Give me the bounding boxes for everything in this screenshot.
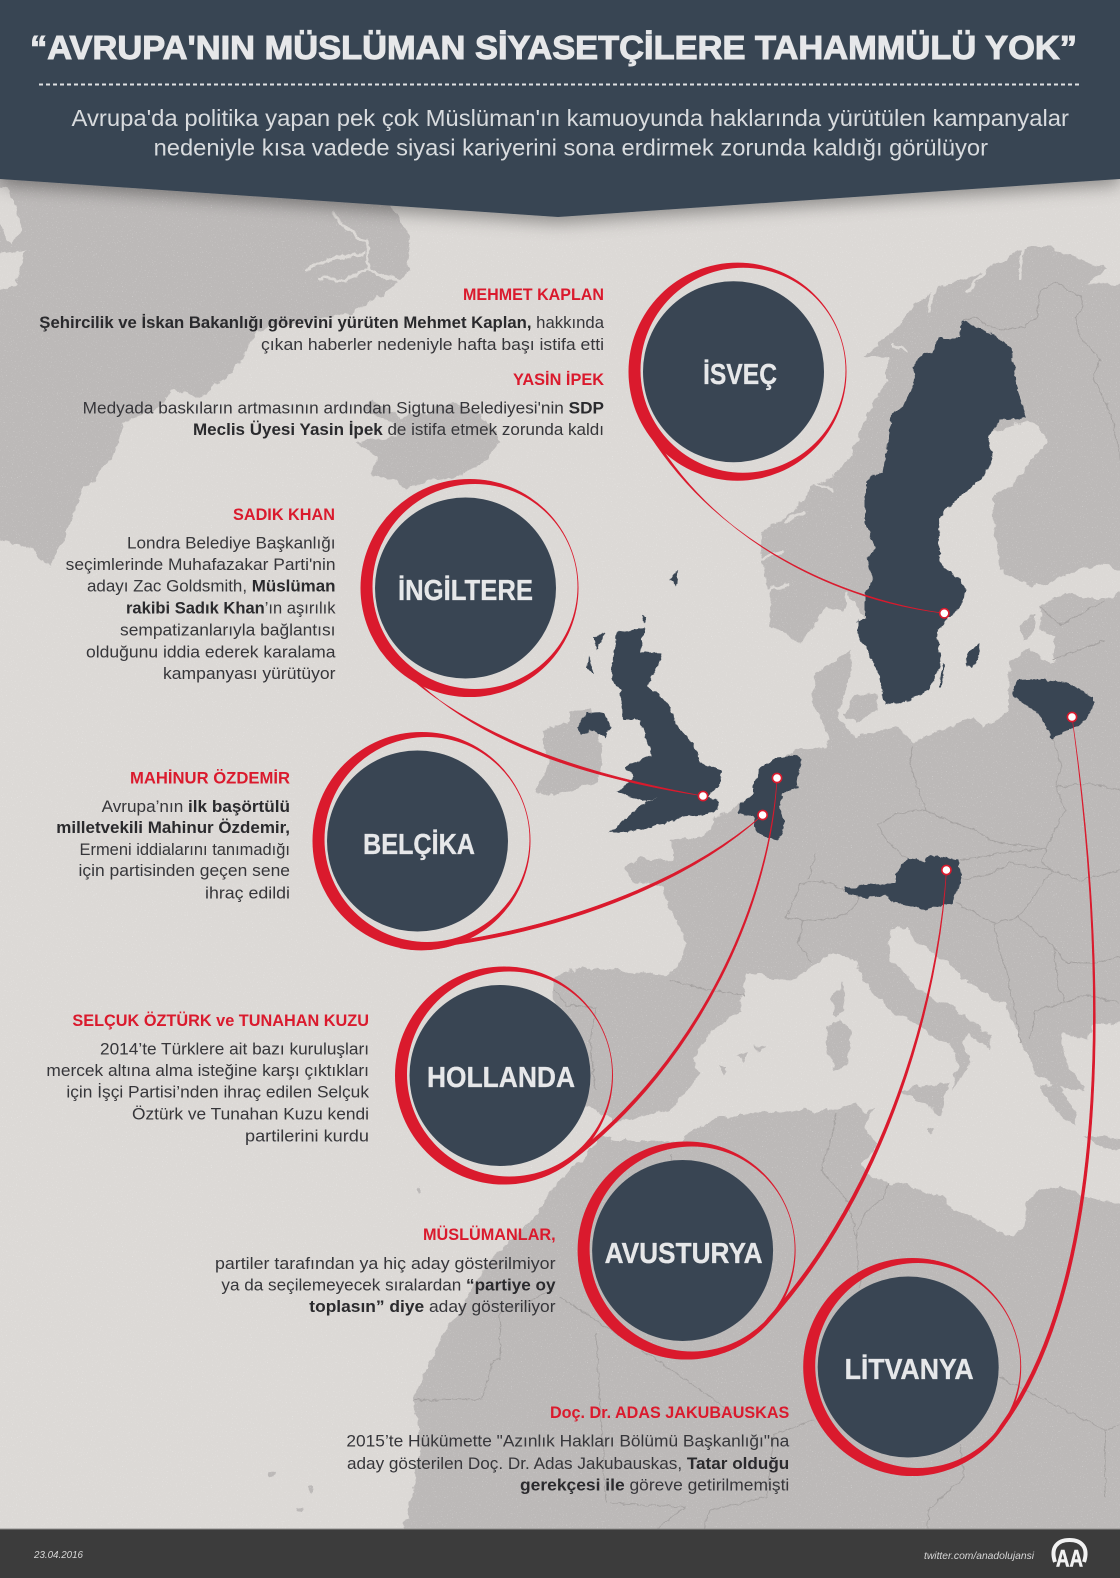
map pin: Amsterdam — [772, 773, 782, 783]
text block: Müslümanlar: MÜSLÜMANLAR, — [423, 1225, 556, 1244]
circle badge: İngiltere — [360, 479, 579, 697]
text block: Mahinur Özdemir — [56, 769, 290, 902]
subtitle: nedeniyle kısa vadede siyasi kariyerini sona erdirmek zorunda kaldığı görülüyor — [154, 134, 988, 160]
circle badge: Belçika: BELÇİKA — [363, 829, 475, 861]
icon: Anadolu Agency logo — [1053, 1540, 1086, 1572]
map pin: Brussels — [758, 810, 767, 820]
text block: Yasin İpek — [83, 370, 605, 439]
connector: Belçika — [400, 815, 763, 950]
text block: Mahinur Özdemir: ihraç edildi — [205, 884, 290, 902]
text block: Sadık Khan: adayı Zac Goldsmith, Müslüman — [87, 577, 336, 596]
text block: Selçuk Öztürk ve Tunahan Kuzu: partilerini kurdu — [245, 1127, 369, 1146]
text block: Yasin İpek: Medyada baskıların artmasının ardından Sigtuna Belediyesi'nin SDP — [83, 398, 604, 417]
text block: Müslümanlar: ya da seçilemeyecek sıralardan “partiye oy — [221, 1276, 556, 1294]
circle badge: Belçika — [312, 732, 531, 950]
map pin: Vienna — [942, 865, 951, 875]
country: Northern Ireland and Scottish islands — [577, 570, 678, 738]
country: Swedish islands — [939, 643, 980, 687]
text block: Sadık Khan: Londra Belediye Başkanlığı — [127, 533, 336, 552]
text block: Sadık Khan: seçimlerinde Muhafazakar Parti'nin — [66, 555, 335, 574]
text block: Selçuk Öztürk ve Tunahan Kuzu: mercek altına alma isteğine karşı çıktıkları — [46, 1061, 369, 1080]
date: 23.04.2016 — [33, 1550, 83, 1561]
text block: Mahinur Özdemir: MAHİNUR ÖZDEMİR — [130, 769, 290, 788]
connector: Hollanda — [542, 778, 777, 1178]
connector: İngiltere — [414, 681, 703, 796]
connector: İsveç — [649, 434, 944, 613]
country: Lithuania — [1012, 679, 1093, 738]
text block: Selçuk Öztürk ve Tunahan Kuzu: Öztürk ve Tunahan Kuzu kendi — [132, 1105, 369, 1124]
text block: Mahinur Özdemir: için partisinden geçen sene — [78, 861, 290, 880]
text block: Müslümanlar — [215, 1225, 556, 1316]
text block: Yasin İpek: YASİN İPEK — [513, 370, 605, 389]
country: United Kingdom — [610, 628, 722, 833]
land: continental Europe — [553, 587, 1120, 1122]
text block: Müslümanlar: toplasın” diye aday gösteriliyor — [309, 1297, 556, 1316]
text block: Sadık Khan: kampanyası yürütüyor — [163, 664, 336, 683]
text block: Selçuk Öztürk ve Tunahan Kuzu: için İşçi Partisi’nden ihraç edilen Selçuk — [66, 1083, 370, 1102]
title: “AVRUPA'NIN MÜSLÜMAN SİYASETÇİLERE TAHAMMÜLÜ YOK” — [30, 29, 1077, 66]
circle badge: Avusturya — [578, 1141, 796, 1360]
text block: Yasin İpek: Meclis Üyesi Yasin İpek de istifa etmek zorunda kaldı — [193, 420, 604, 439]
text block: Adas Jakubauskas — [346, 1403, 790, 1495]
text block: Mehmet Kaplan — [39, 285, 605, 354]
connector: Avusturya — [724, 870, 946, 1352]
text block: Mahinur Özdemir: Avrupa’nın ilk başörtülü — [102, 797, 290, 816]
text block: Selçuk Öztürk ve Tunahan Kuzu: 2014’te Türklere ait bazı kuruluşları — [100, 1039, 369, 1058]
footer bar — [0, 1528, 1120, 1578]
text block: Adas Jakubauskas: gerekçesi ile göreve getirilmemişti — [520, 1476, 789, 1495]
country: Sweden — [857, 320, 1027, 705]
circle badge: Hollanda: HOLLANDA — [427, 1062, 575, 1094]
circle badge: Hollanda — [395, 966, 613, 1185]
text block: Sadık Khan: olduğunu iddia ederek karalama — [86, 642, 336, 661]
land: North Africa — [402, 1103, 1120, 1540]
circle badge: Litvanya — [803, 1258, 1021, 1476]
subtitle: Avrupa'da politika yapan pek çok Müslüman'ın kamuoyunda haklarında yürütülen kampanyalar — [72, 105, 1069, 131]
map pin: London — [698, 791, 708, 801]
land: Greenland — [0, 170, 410, 567]
circle badge: İsveç: İSVEÇ — [703, 359, 777, 391]
land: Danish, Baltic and Mediterranean islands — [268, 615, 1120, 1513]
text block: Adas Jakubauskas: Doç. Dr. ADAS JAKUBAUSKAS — [550, 1403, 789, 1422]
text block: Mehmet Kaplan: MEHMET KAPLAN — [463, 285, 604, 304]
land: Iceland — [355, 400, 500, 487]
twitter address: twitter.com/anadolujansi — [924, 1550, 1035, 1562]
circle badge: İsveç — [628, 263, 847, 481]
country: Austria — [844, 855, 961, 909]
text block: Sadık Khan: rakibi Sadık Khan’ın aşırılık — [126, 598, 336, 617]
circle badge: Avusturya: AVUSTURYA — [605, 1238, 763, 1270]
subtitle — [72, 105, 1069, 160]
land: Ireland — [537, 708, 603, 797]
circle badge: Litvanya: LİTVANYA — [845, 1354, 974, 1386]
text block: Sadık Khan — [66, 505, 336, 683]
land: Norway and Finland — [758, 247, 1120, 643]
text block: Adas Jakubauskas: 2015’te Hükümette "Azınlık Hakları Bölümü Başkanlığı"na — [346, 1432, 790, 1451]
text block: Adas Jakubauskas: aday gösterilen Doç. Dr. Adas Jakubauskas, Tatar olduğu — [347, 1454, 789, 1473]
map pin: Vilnius — [1067, 712, 1077, 722]
text block: Selçuk Öztürk ve Tunahan Kuzu: SELÇUK ÖZTÜRK ve TUNAHAN KUZU — [72, 1011, 369, 1030]
highlighted countries — [577, 320, 1093, 909]
text block: Mehmet Kaplan: Şehircilik ve İskan Bakanlığı görevini yürüten Mehmet Kaplan, hakkında — [39, 313, 605, 332]
icon: Anadolu Agency logo: AA — [1056, 1546, 1083, 1572]
circle badge: İngiltere: İNGİLTERE — [398, 575, 533, 607]
text block: Mahinur Özdemir: Ermeni iddialarını tanımadığı — [80, 840, 290, 859]
connector: Litvanya — [950, 717, 1095, 1469]
header banner — [0, 0, 1120, 217]
text block: Sadık Khan: sempatizanlarıyla bağlantısı — [120, 621, 336, 640]
text block: Müslümanlar: partiler tarafından ya hiç aday gösterilmiyor — [215, 1254, 556, 1273]
country: Netherlands and Belgium — [739, 755, 802, 840]
country borders — [414, 282, 1120, 1530]
text block: Selçuk Öztürk ve Tunahan Kuzu — [46, 1011, 370, 1146]
map pin: Stockholm — [940, 609, 949, 618]
text block: Mahinur Özdemir: milletvekili Mahinur Özdemir, — [56, 818, 290, 837]
text block: Sadık Khan: SADIK KHAN — [233, 505, 335, 524]
text block: Mehmet Kaplan: çıkan haberler nedeniyle hafta başı istifa etti — [261, 335, 604, 354]
